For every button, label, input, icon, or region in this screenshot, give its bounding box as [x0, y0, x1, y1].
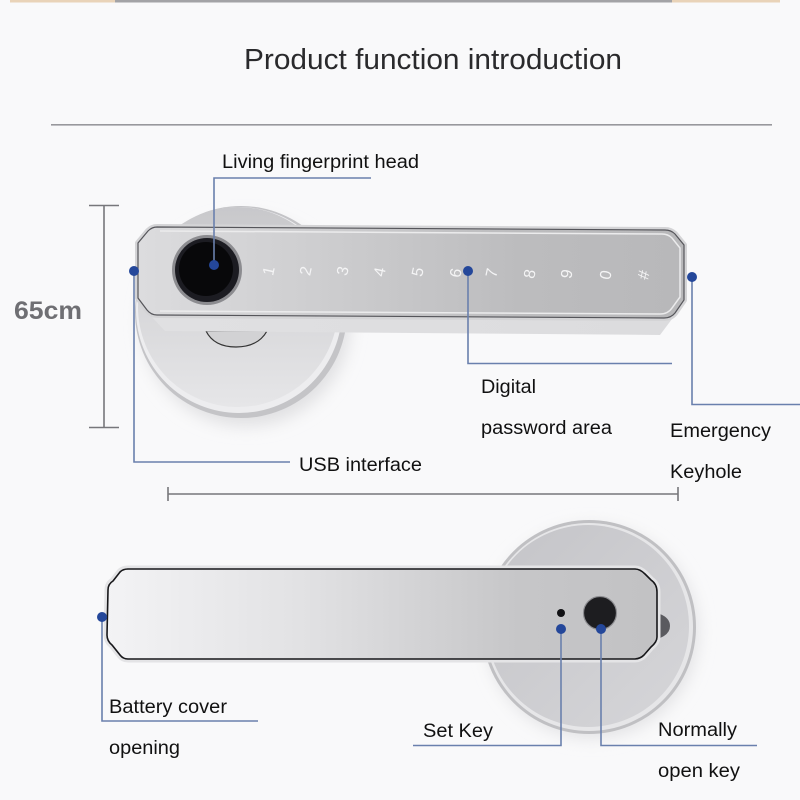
- side knob: [660, 614, 670, 638]
- set key hole: [557, 609, 565, 617]
- normally open button: [584, 596, 616, 630]
- bottom lock illustration: [107, 520, 698, 738]
- keypad digits: 8: [521, 268, 540, 280]
- handle body: [138, 227, 684, 335]
- top lock illustration: [135, 206, 684, 426]
- callout: digital password area: [463, 266, 672, 439]
- callout: emergency keyhole: [670, 272, 800, 483]
- callout: living fingerprint head: Living fingerprint head: [222, 152, 419, 173]
- callout: set key: [413, 624, 566, 746]
- callout: normally open key: [596, 624, 757, 782]
- title: Product function introduction: [244, 44, 622, 76]
- callout: battery cover opening: opening: [109, 738, 180, 759]
- width dimension: [168, 487, 678, 501]
- callout: normally open key: open key: [658, 761, 741, 782]
- callout: normally open key: Normally: [658, 720, 738, 741]
- rose plate shadow: [142, 218, 350, 426]
- keypad digits: 6: [447, 267, 466, 279]
- height label: 65cm: [14, 297, 82, 325]
- callout: set key: Set Key: [423, 721, 494, 742]
- keypad digits: [260, 265, 654, 281]
- header divider: [51, 124, 772, 126]
- keypad digits: 1: [260, 265, 279, 277]
- callout: emergency keyhole: Keyhole: [670, 462, 742, 483]
- keypad digits: 0: [597, 269, 616, 281]
- keypad digits: 9: [558, 268, 577, 280]
- fingerprint sensor: [172, 235, 242, 305]
- callout: living fingerprint head: [209, 152, 419, 270]
- keypad digits: 4: [371, 266, 390, 278]
- callout: emergency keyhole: Emergency: [670, 421, 772, 442]
- callout: USB interface: USB interface: [299, 455, 422, 476]
- top image strip: [10, 0, 780, 2]
- callout: battery cover opening: [97, 612, 258, 759]
- bottom rose plate: [482, 520, 698, 738]
- keypad digits: 5: [409, 266, 428, 278]
- keypad digits: 2: [297, 265, 316, 277]
- height dimension: 65cm: [14, 206, 119, 428]
- callout: digital password area: Digital: [481, 377, 536, 398]
- bottom handle body: [107, 569, 657, 659]
- spindle: [206, 331, 267, 347]
- callout: battery cover opening: Battery cover: [109, 697, 228, 718]
- callout: USB interface: [129, 266, 422, 476]
- rose plate: [135, 206, 347, 418]
- callout: digital password area: password area: [481, 418, 612, 439]
- keypad digits: 3: [334, 265, 353, 277]
- keypad digits: 7: [483, 267, 502, 279]
- keypad digits: #: [635, 269, 654, 281]
